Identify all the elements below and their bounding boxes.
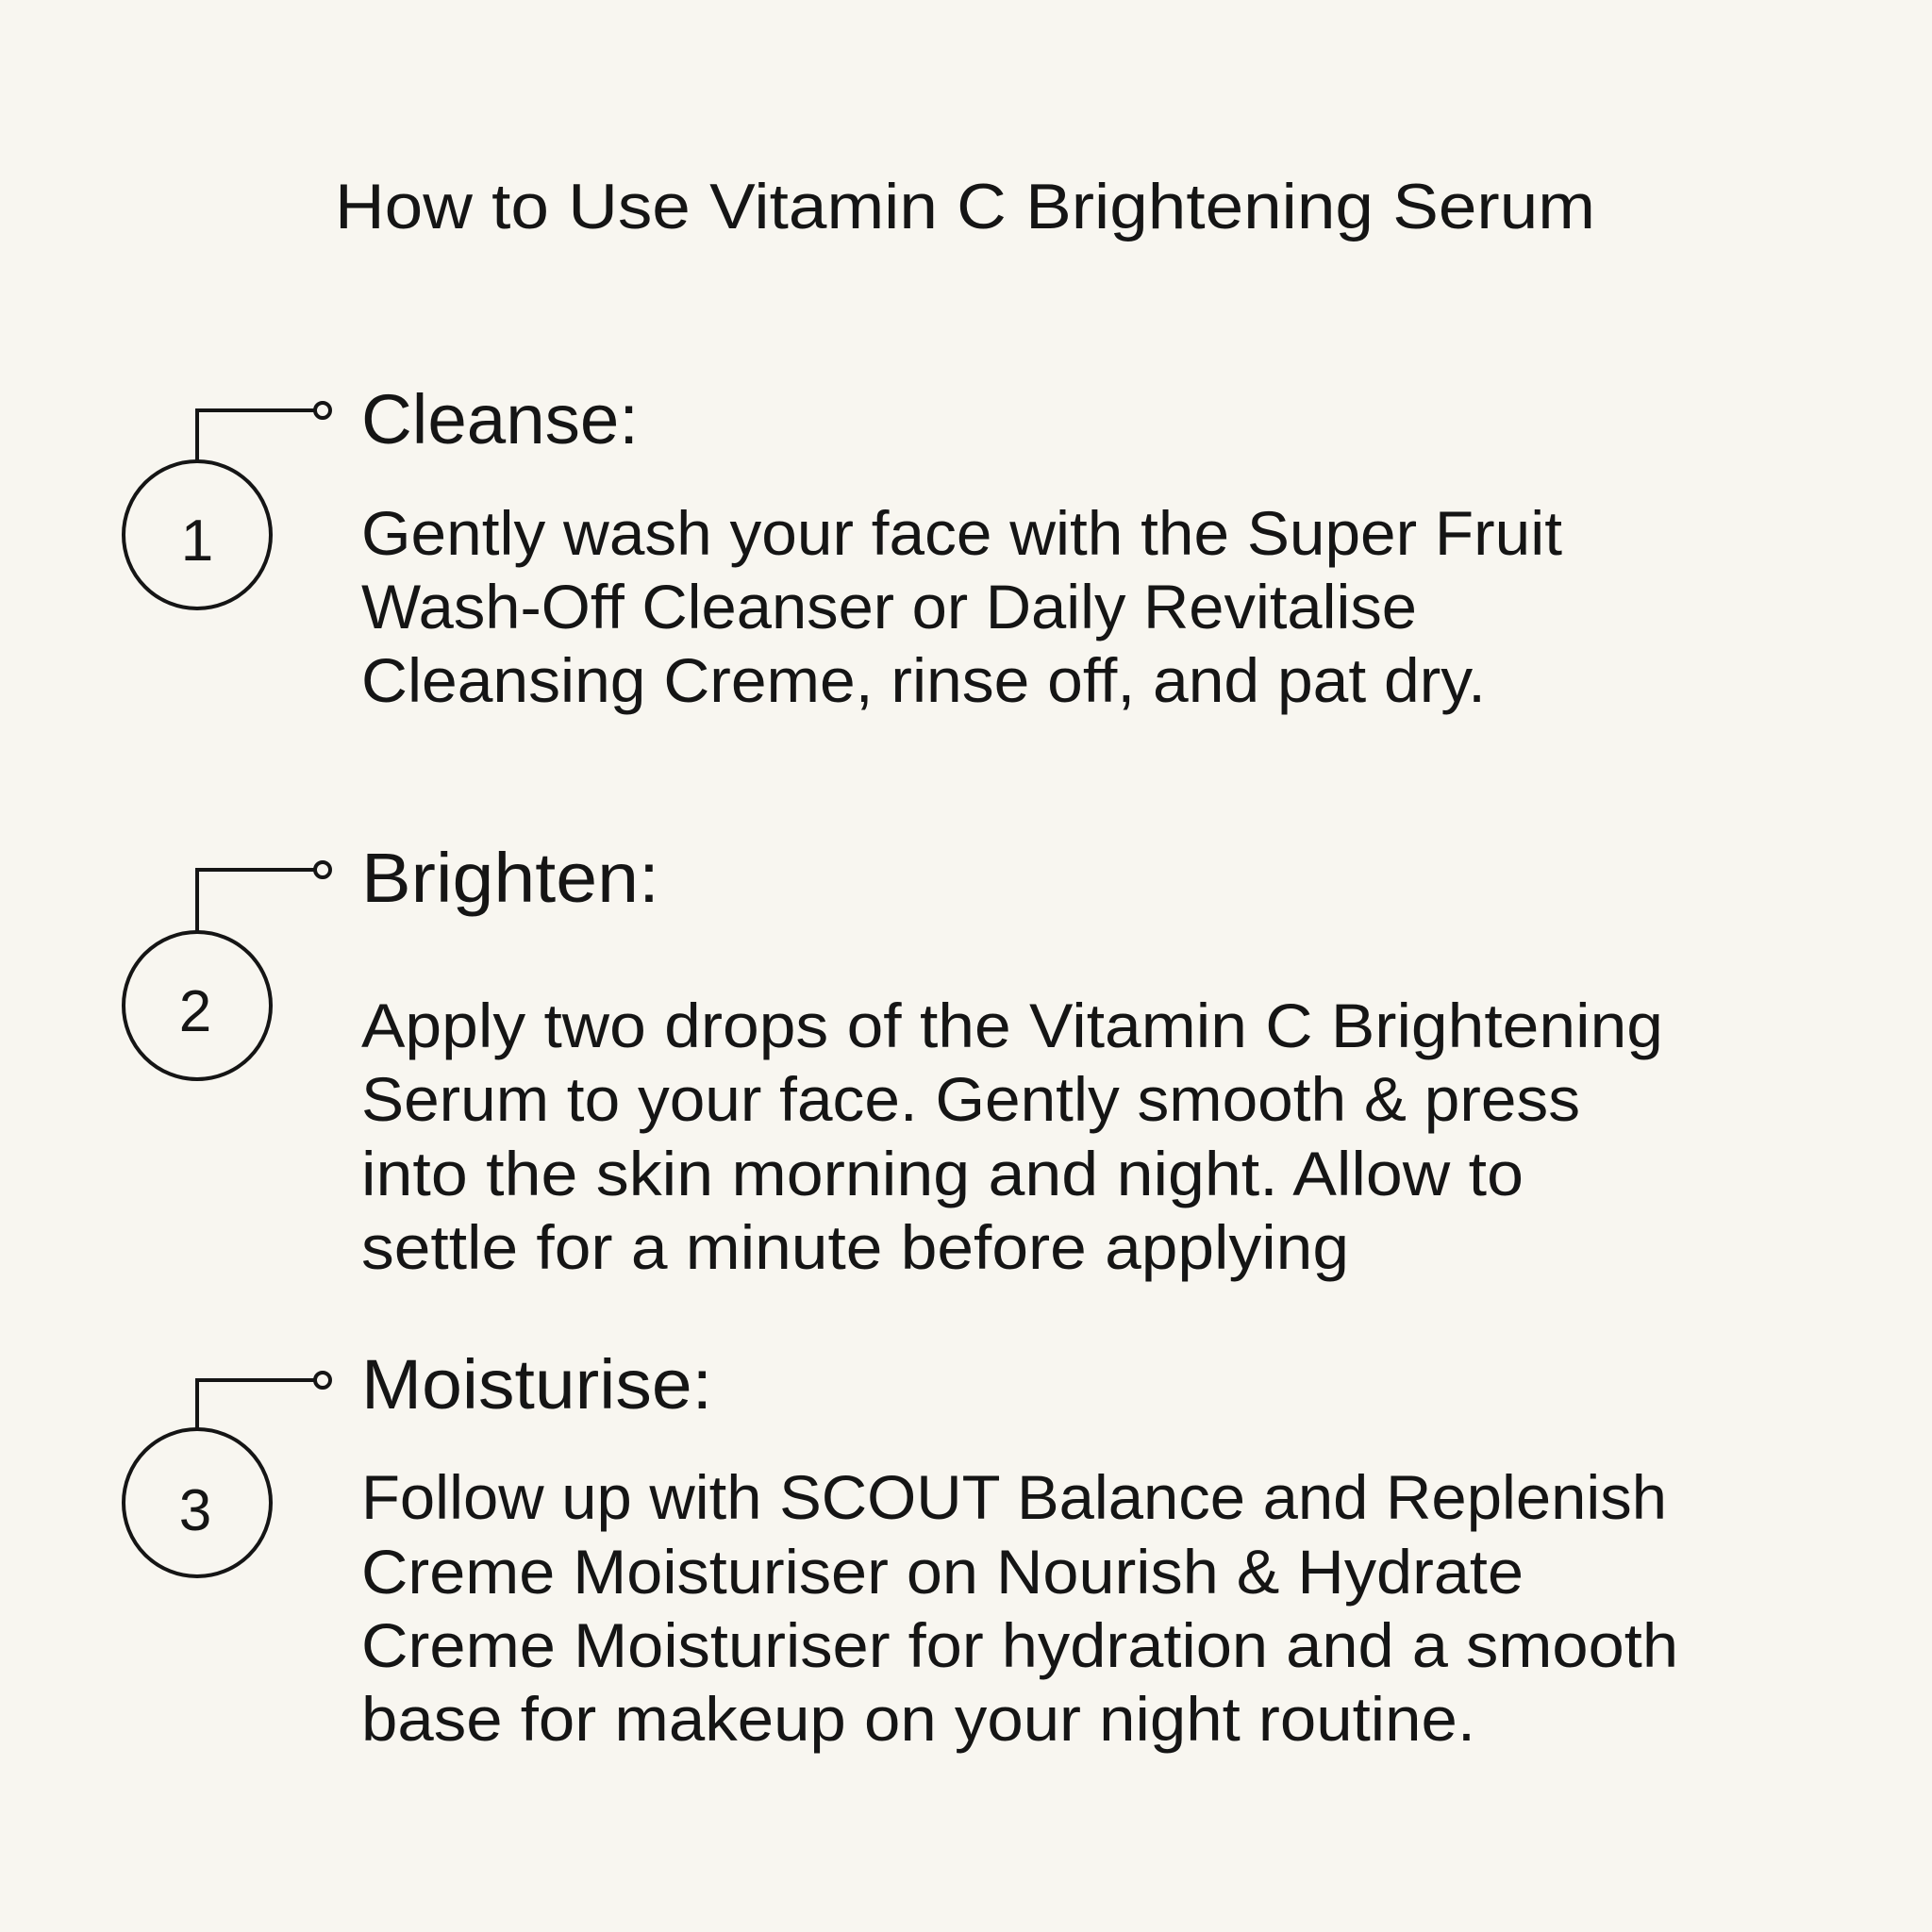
body text: cleanse: Gently wash your face with the Super Fruit	[361, 498, 1562, 568]
body text: moisturise: Creme Moisturiser for hydration and a smooth	[361, 1610, 1678, 1680]
number 2: 2	[179, 979, 211, 1044]
body text: moisturise	[361, 1462, 1678, 1754]
step 3: moisturise	[124, 1345, 1678, 1754]
body text: brighten: settle for a minute before applying	[361, 1212, 1349, 1282]
body text: brighten: into the skin morning and night. Allow to	[361, 1139, 1524, 1208]
heading: brighten: Brighten:	[361, 839, 659, 917]
number 3: 3	[179, 1478, 211, 1543]
number 1: 1	[181, 508, 213, 574]
body text: brighten	[361, 991, 1663, 1282]
body text: brighten: Apply two drops of the Vitamin C Brightening	[361, 991, 1663, 1060]
body text: cleanse: Wash-Off Cleanser or Daily Revitalise	[361, 572, 1417, 641]
icon: number circle 3 with connector	[124, 1373, 330, 1576]
body text: brighten: Serum to your face. Gently smooth & press	[361, 1064, 1580, 1134]
body text: moisturise: Creme Moisturiser on Nourish & Hydrate	[361, 1537, 1524, 1607]
icon: number circle 1 with connector	[124, 403, 330, 608]
heading: cleanse: Cleanse:	[361, 380, 639, 458]
body text: moisturise: Follow up with SCOUT Balance and Replenish	[361, 1462, 1667, 1532]
heading: moisturise: Moisturise:	[361, 1345, 712, 1424]
body text: cleanse	[361, 498, 1562, 715]
title: How to Use Vitamin C Brightening Serum	[335, 171, 1595, 242]
icon: number circle 2 with connector	[124, 862, 330, 1079]
step 1: cleanse	[124, 380, 1562, 715]
body text: cleanse: Cleansing Creme, rinse off, and pat dry.	[361, 645, 1486, 715]
body text: moisturise: base for makeup on your night routine.	[361, 1684, 1475, 1754]
step 2: brighten	[124, 839, 1663, 1282]
